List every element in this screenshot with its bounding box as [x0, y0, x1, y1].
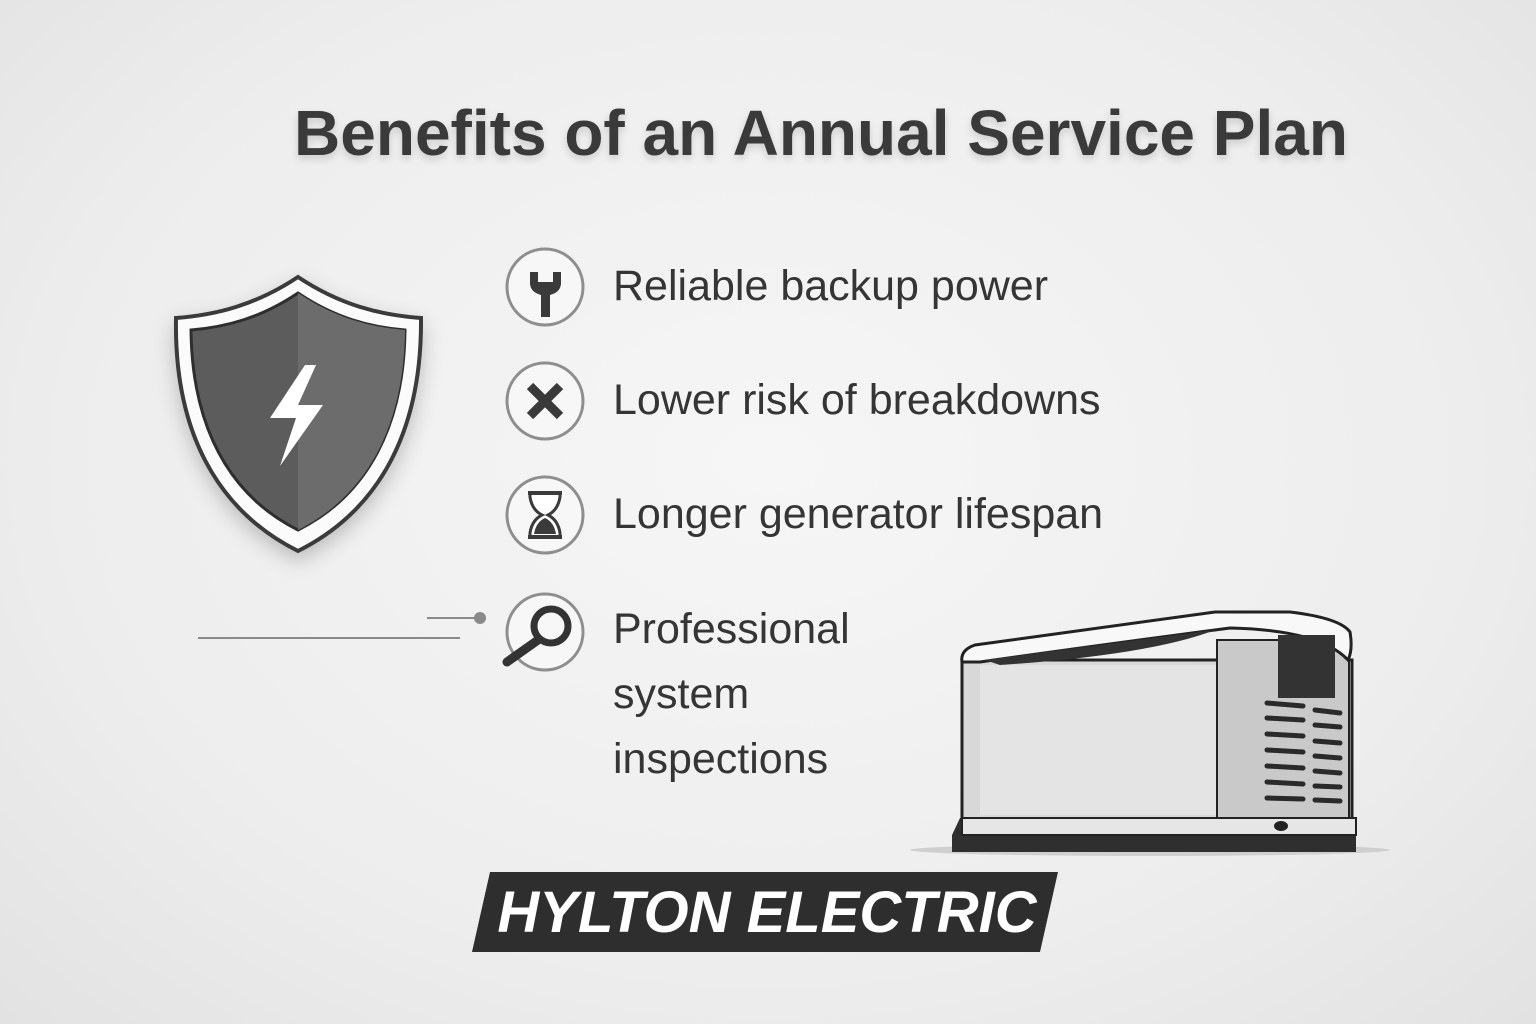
benefit: lower risk: Lower risk of breakdowns — [613, 376, 1101, 424]
benefit: inspections — [613, 605, 850, 783]
connector lines — [198, 613, 485, 638]
title: Benefits of an Annual Service Plan — [294, 97, 1348, 169]
benefit: reliable backup power: Reliable backup power — [613, 262, 1048, 310]
benefit: inspections: inspections — [613, 735, 828, 783]
icon: shield with lightning — [176, 277, 421, 551]
icon: magnifier — [507, 594, 583, 670]
generator — [910, 612, 1390, 856]
icon: hourglass — [507, 477, 583, 553]
icon: cross tools — [507, 363, 583, 439]
logo banner: HYLTON ELECTRIC — [497, 880, 1038, 945]
benefit: inspections: system — [613, 670, 749, 718]
icon: wrench — [507, 249, 583, 325]
benefit: inspections: Professional — [613, 605, 850, 653]
benefit: longer lifespan: Longer generator lifespan — [613, 490, 1103, 538]
